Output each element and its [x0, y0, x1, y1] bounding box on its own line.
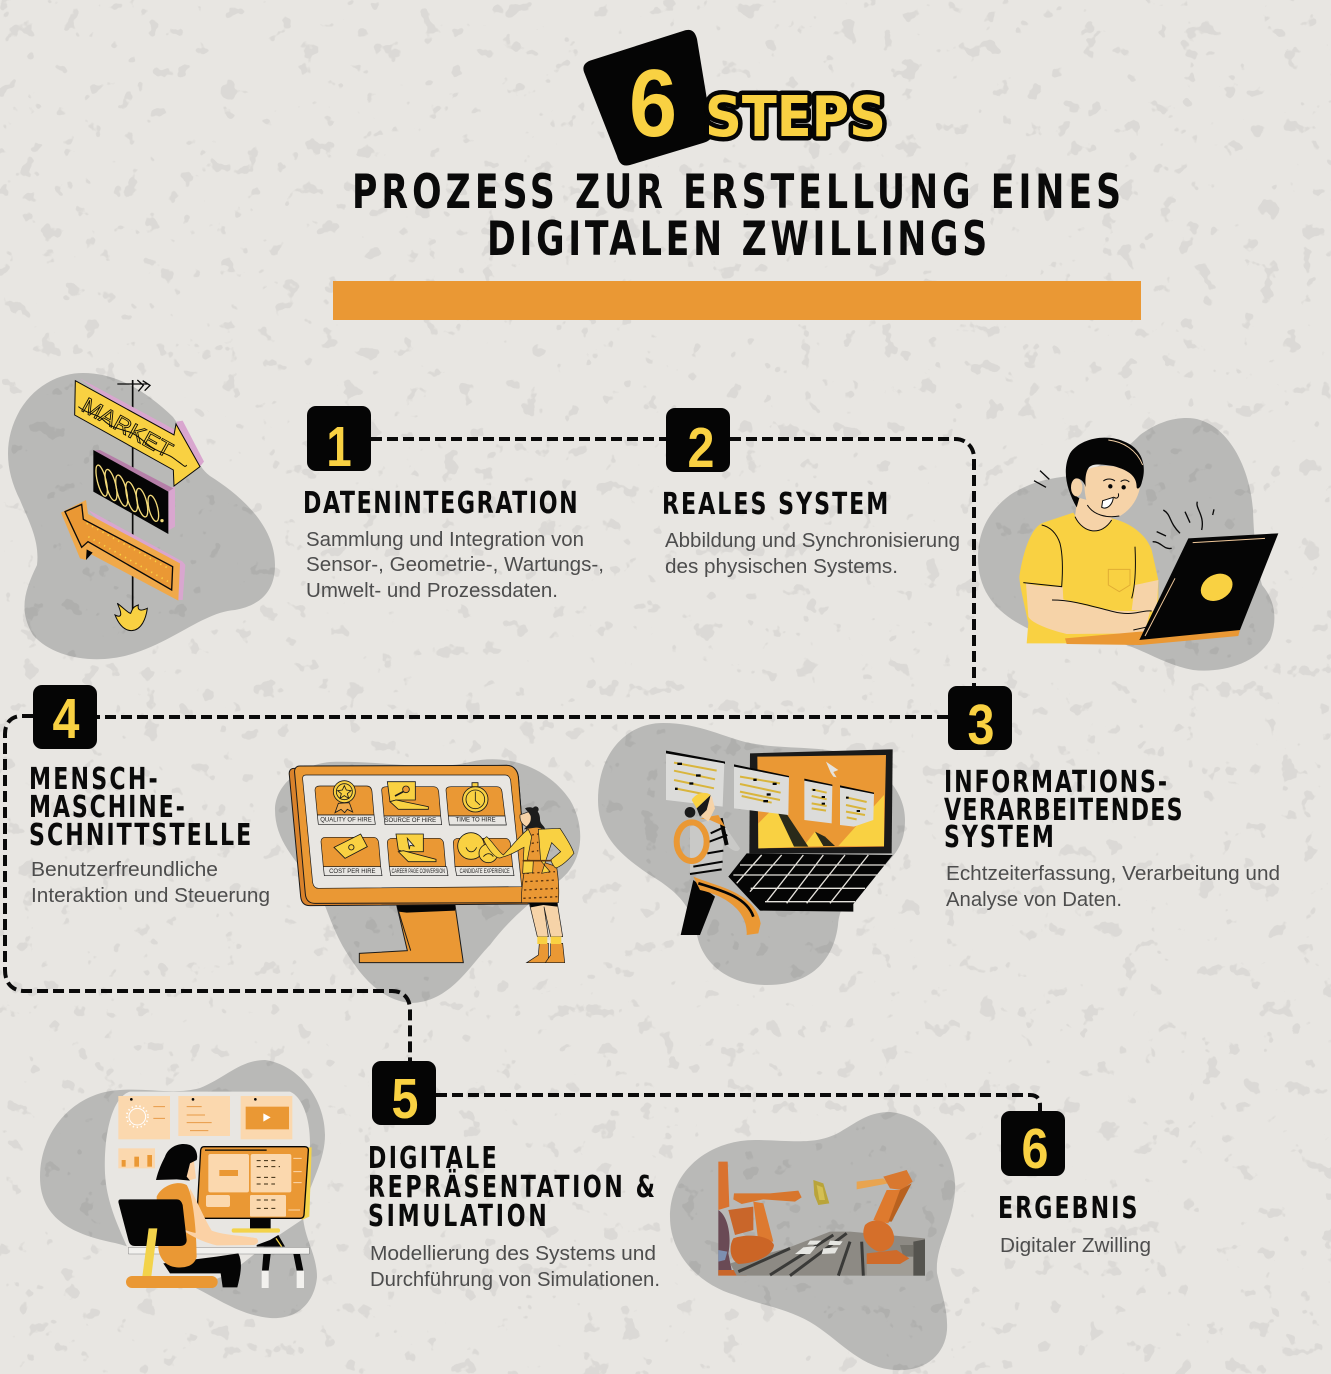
- step 6 panel: [998, 1111, 1151, 1257]
- connector: step 4 to step 5: [5, 716, 410, 1061]
- illustration: kiosk monitor with KPI cards and woman: TIME TO HIRE: [456, 818, 496, 824]
- body text: step 4: [31, 858, 270, 907]
- heading: Mensch-Maschine-Schnittstelle: [29, 763, 251, 853]
- illustration: woman at desktop computer: [105, 1092, 312, 1290]
- connector: step 5 to step 6: [436, 1095, 1040, 1111]
- main title: DIGITALEN ZWILLINGS: [487, 212, 987, 267]
- blob: step 2 illustration backdrop: [978, 418, 1274, 671]
- illustration: kiosk monitor with KPI cards and woman: CAREER PAGE CONVERSION: [392, 869, 445, 875]
- body text: step 1: Sammlung und Integration von: [306, 528, 584, 551]
- step 1 panel: [303, 406, 604, 602]
- body text: step 2: des physischen Systems.: [665, 555, 898, 578]
- badge: number 5: [372, 1061, 436, 1131]
- blob: step 1 illustration backdrop: [8, 373, 275, 659]
- badge: number 4: [33, 685, 97, 751]
- badge: number 4: 4: [53, 687, 80, 751]
- illustration: market signpost: MARKET: [78, 393, 177, 463]
- badge: number 3: [948, 686, 1012, 757]
- badge: number 3: 3: [968, 693, 994, 757]
- body text: step 2: Abbildung und Synchronisierung: [665, 529, 960, 552]
- body text: step 4: Interaktion und Steuerung: [31, 884, 270, 907]
- step 2 panel: [662, 408, 960, 578]
- body text: step 1: Umwelt- und Prozessdaten.: [306, 579, 558, 602]
- badge: number 5: 5: [392, 1067, 418, 1131]
- heading: Mensch-Maschine-Schnittstelle: SCHNITTSTELLE: [29, 819, 251, 853]
- body text: step 3: Analyse von Daten.: [946, 888, 1122, 911]
- body text: step 4: Benutzerfreundliche: [31, 858, 218, 881]
- illustration: kiosk monitor with KPI cards and woman: [289, 765, 574, 963]
- illustration: kiosk monitor with KPI cards and woman: CANDIDATE EXPERIENCE: [460, 869, 510, 875]
- orange title bar: [333, 281, 1141, 320]
- step 3 panel: [944, 686, 1280, 911]
- body text: step 1: Sensor-, Geometrie-, Wartungs-,: [306, 553, 604, 576]
- heading: Informationsverarbeitendes System: INFORMATIONS-: [944, 766, 1167, 800]
- body text: step 5: Durchführung von Simulationen.: [370, 1268, 660, 1291]
- heading: Reales System: REALES SYSTEM: [662, 488, 888, 522]
- heading: Informationsverarbeitendes System: [944, 766, 1183, 855]
- badge: number 6: [1001, 1111, 1065, 1181]
- illustration: kiosk monitor with KPI cards and woman: COST PER HIRE: [329, 869, 376, 875]
- illustration: kiosk monitor with KPI cards and woman: QUALITY OF HIRE: [320, 818, 372, 824]
- main title: [352, 165, 1121, 267]
- step 4 panel: [29, 685, 270, 907]
- heading: Mensch-Maschine-Schnittstelle: MENSCH-: [29, 763, 158, 797]
- connector: step 3 to step 4: [97, 715, 948, 719]
- body text: step 3: [946, 862, 1280, 911]
- body text: step 6: Digitaler Zwilling: [1000, 1234, 1151, 1257]
- illustration: kiosk monitor with KPI cards and woman: SOURCE OF HIRE: [385, 818, 436, 824]
- badge: number 2: [666, 408, 730, 480]
- header: 6 steps logo: 6: [629, 50, 677, 157]
- header: 6 steps logo: [583, 30, 886, 166]
- connector: step 2 to step 3: [730, 439, 974, 686]
- blob: step 3 illustration backdrop: [598, 723, 905, 985]
- body text: step 5: Modellierung des Systems und: [370, 1242, 656, 1265]
- main title: PROZESS ZUR ERSTELLUNG EINES: [352, 165, 1121, 220]
- illustration: woman with large laptop and floating windows: [666, 749, 893, 935]
- blob: step 6 illustration backdrop: [670, 1112, 955, 1370]
- badge: number 2: 2: [688, 416, 714, 480]
- body text: step 2: [665, 529, 960, 578]
- heading: Digitale Repräsentation und Simulation: SIMULATION: [368, 1200, 547, 1234]
- illustration: man at laptop: [1019, 438, 1278, 645]
- body text: step 5: [370, 1242, 660, 1291]
- badge: number 6: 6: [1022, 1117, 1048, 1181]
- badge: number 1: [307, 406, 371, 478]
- heading: Datenintegration: DATENINTEGRATION: [303, 487, 578, 521]
- step 5 panel: [368, 1061, 660, 1291]
- heading: Informationsverarbeitendes System: VERARBEITENDES: [944, 794, 1183, 828]
- badge: number 1: 1: [326, 414, 352, 478]
- heading: Digitale Repräsentation und Simulation: DIGITALE: [368, 1142, 497, 1176]
- heading: Digitale Repräsentation und Simulation: [368, 1142, 655, 1234]
- illustration: industrial robot arms photo: [718, 1162, 925, 1276]
- illustration: market signpost: [61, 378, 204, 631]
- body text: step 3: Echtzeiterfassung, Verarbeitung und: [946, 862, 1280, 885]
- heading: Digitale Repräsentation und Simulation: REPRÄSENTATION &: [368, 1170, 655, 1205]
- header: 6 steps logo: STEPS: [705, 85, 886, 150]
- heading: Informationsverarbeitendes System: SYSTEM: [944, 821, 1054, 855]
- body text: step 1: [306, 528, 604, 602]
- heading: Ergebnis: ERGEBNIS: [998, 1192, 1137, 1226]
- blob: step 4 illustration backdrop: [275, 759, 580, 1003]
- blob: step 5 illustration backdrop: [40, 1060, 325, 1318]
- heading: Mensch-Maschine-Schnittstelle: MASCHINE-: [29, 791, 185, 825]
- connector: step 1 to step 2: [371, 437, 666, 441]
